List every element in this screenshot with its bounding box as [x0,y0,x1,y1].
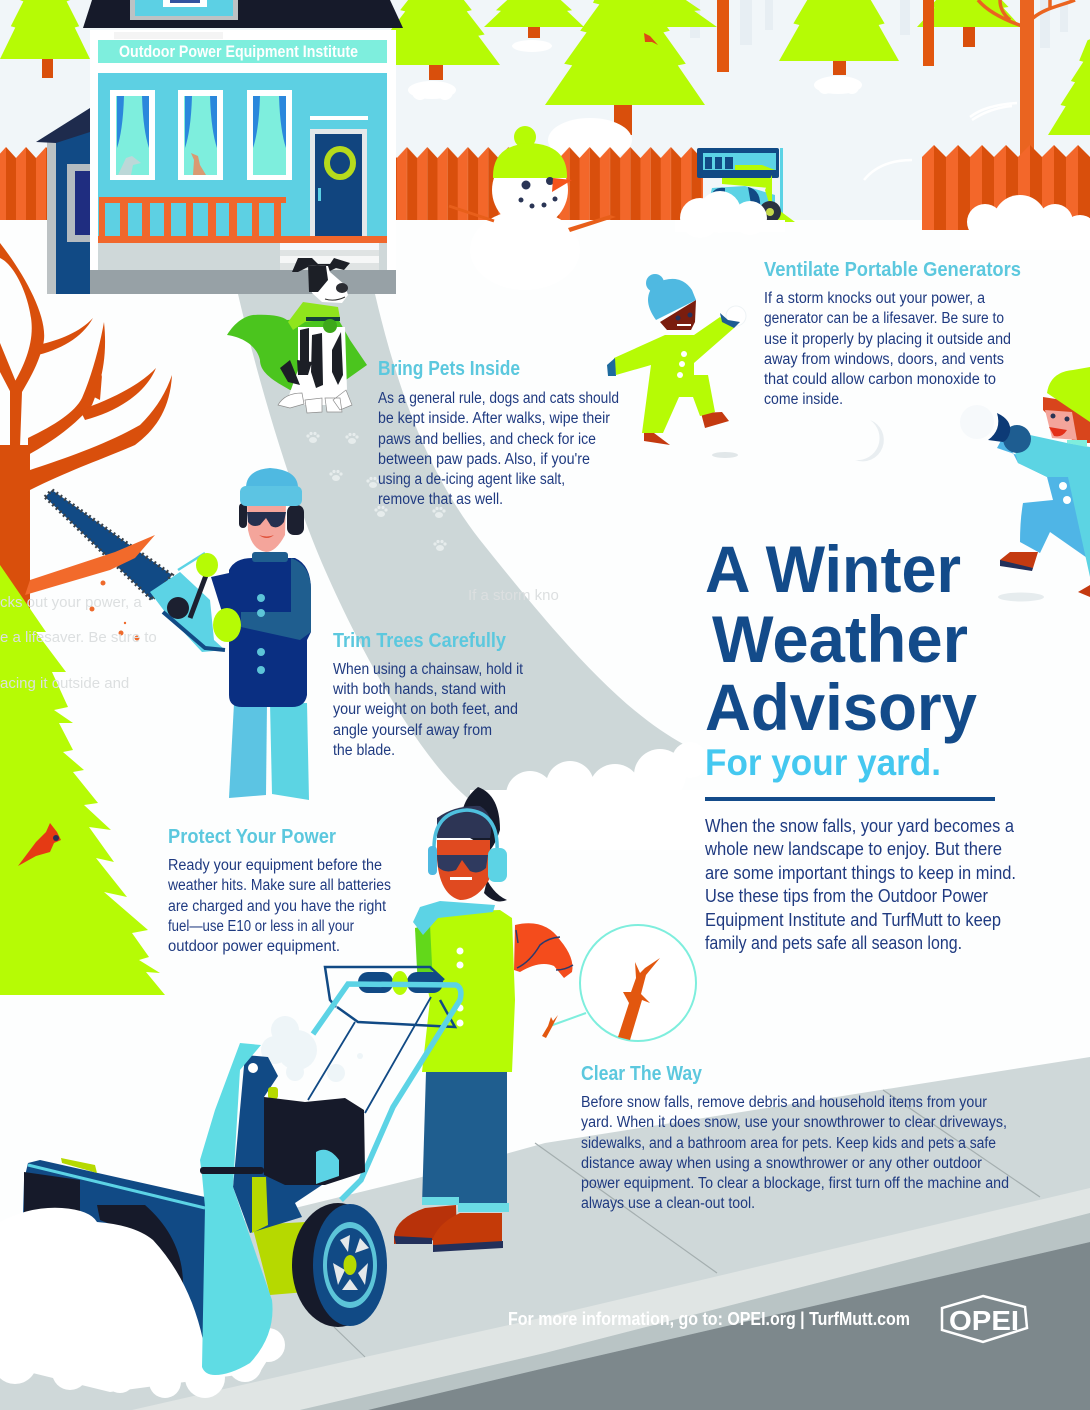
snowball [726,306,746,326]
snowy pathway [238,294,685,800]
branch being cut [25,535,155,595]
gloves [196,553,218,577]
pants [229,703,267,798]
text: trim trees carefully: with both hands, stand with [332,681,506,698]
text: clear the way [581,1063,1009,1212]
sidewalk and street [0,1057,1090,1410]
intro paragraph [704,815,1016,953]
windows [110,90,292,180]
text: ventilate portable generators: away from windows, doors, and vents [764,351,1004,368]
snow pile in front of snowblower [0,1208,285,1398]
twig callout [542,925,696,1041]
text: bring pets inside: using a de-icing agent like salt, [378,471,565,488]
icon: OPEI logo: OPEI [949,1305,1019,1336]
coat [229,558,311,707]
snowblower [0,967,461,1398]
text: protect your power [167,826,391,955]
text: bring pets inside: Bring Pets Inside [378,358,520,380]
snowball kid in lime suit [607,274,746,445]
headphones [434,810,497,852]
text: protect your power: Ready your equipment before the [168,857,382,874]
ghost text fragments: cks out your power, a [0,594,142,611]
woman with snowblower [394,787,573,1252]
ground shadows and snowball traces [712,420,1044,602]
ghost text fragments [0,587,559,692]
boots [701,412,729,428]
text: ventilate portable generators: Ventilate Portable Generators [764,259,1021,281]
text: clear the way: power equipment. To clear a blockage, first turn off the machine and [581,1175,1009,1192]
hair [462,787,500,850]
handlebars [308,967,461,1200]
face [437,840,490,900]
paw prints [306,432,447,551]
text: clear the way: always use a clean-out tool. [581,1195,755,1212]
wheel [292,1203,387,1327]
orange debris sleeve [514,923,573,978]
intro paragraph: are some important things to keep in mind. [705,862,1016,883]
text: protect your power: outdoor power equipment. [168,938,340,955]
lime frame [252,1222,306,1295]
big bare tree at left [0,243,172,655]
ghost text fragments: acing it outside and [0,675,129,692]
text: bring pets inside: paws and bellies, and check for ice [378,431,596,448]
text: clear the way: Clear The Way [581,1063,703,1085]
blue chassis [233,1055,325,1233]
title: A Winter [705,532,961,606]
text: bring pets inside: remove that as well. [378,491,503,508]
pants [422,1072,507,1205]
chute and shield [200,1043,273,1375]
background trees [0,0,1090,135]
text: bring pets inside: between paw pads. Also, if you're [378,451,590,468]
sawdust [90,580,140,640]
text: ventilate portable generators: generator can be a lifesaver. Be sure to [764,310,1004,327]
head [660,300,696,330]
side building [36,108,90,294]
engine [264,1097,365,1185]
snow mounds by the fence [675,191,1090,250]
text: trim trees carefully: the blade. [333,742,395,759]
cape [227,315,367,390]
chainsaw bar [45,490,225,652]
big pine tree at left [0,565,165,995]
text: protect your power: weather hits. Make sure all batteries [167,877,391,894]
intro paragraph: Use these tips from the Outdoor Power [705,885,988,906]
title divider [705,797,995,801]
intro paragraph: whole new landscape to enjoy. But there [704,838,1002,859]
large twig [618,958,660,1040]
boots [394,1205,457,1244]
text: bring pets inside [378,358,619,508]
text: ventilate portable generators: use it properly by placing it outside and [764,331,1011,348]
text: ventilate portable generators: If a storm knocks out your power, a [764,290,985,307]
intro paragraph: Equipment Institute and TurfMutt to keep [705,909,1001,930]
suit [614,317,734,433]
text: trim trees carefully: your weight on both feet, and [333,701,518,718]
porch railing [98,197,387,243]
house [36,0,403,294]
text: trim trees carefully: When using a chainsaw, hold it [333,661,524,678]
blower snow puff [261,1016,363,1082]
title: Advisory [705,670,977,744]
head [247,503,286,552]
text: protect your power: fuel—use E10 or less in all your [168,918,354,935]
dog with green cape [227,258,367,413]
icon: red cardinal [18,823,61,866]
house wall [90,30,396,294]
text: clear the way: distance away when using a snowthrower or any other outdoor [581,1155,982,1172]
text: ventilate portable generators [764,259,1021,408]
text: clear the way: sidewalks, and a bathroom area for pets. Keep kids and pets a safe [581,1135,996,1152]
ghost text fragments: If a storm kno [468,587,559,604]
icon: small cardinal in pine [644,33,658,45]
small twig [542,1015,558,1038]
icon: OPEI logo [942,1296,1027,1342]
text: protect your power: are charged and you have the right [168,898,387,915]
coat [415,910,515,1072]
roof and dormer [83,0,403,28]
snowball kid in blue suit [960,367,1090,597]
snow piles at tree bases [408,40,862,162]
hat [246,468,298,488]
text: bring pets inside: As a general rule, dogs and cats should [378,390,619,407]
text: clear the way: yard. When it does snow, use your snowthrower to clear driveways, [581,1114,1007,1131]
dog body [278,258,352,413]
title [705,532,977,744]
text: clear the way: Before snow falls, remove debris and household items from your [581,1094,987,1111]
intro paragraph: family and pets safe all season long. [705,932,962,953]
hat [646,274,664,292]
wooden fences [0,145,1090,230]
text: ventilate portable generators: that could allow carbon monoxide to [764,371,996,388]
chainsaw operator [25,468,311,800]
text: trim trees carefully [332,630,524,759]
title: Weather [712,602,968,676]
footer link text: For more information, go to: OPEI.org | TurfMutt.com [508,1309,910,1329]
snow mound at end of path [470,742,710,850]
auger housing [23,1158,205,1350]
icon: bare tree top right [978,0,1075,160]
ghost text fragments: e a lifesaver. Be sure to [0,629,157,646]
subtitle: For your yard. [705,742,941,783]
text: trim trees carefully: Trim Trees Carefully [333,630,507,652]
front door with wreath [310,129,367,236]
text: protect your power: Protect Your Power [168,826,336,848]
text: bring pets inside: be kept inside. After walks, wipe their [378,410,610,427]
front steps [280,243,379,270]
scarf [413,901,495,935]
sign band: Outdoor Power Equipment Institute [119,43,358,61]
generator behind the fence [697,148,795,223]
intro paragraph: When the snow falls, your yard becomes a [705,815,1015,836]
text: ventilate portable generators: come inside. [764,391,843,408]
text: trim trees carefully: angle yourself away from [333,722,492,739]
snowman [449,126,616,290]
